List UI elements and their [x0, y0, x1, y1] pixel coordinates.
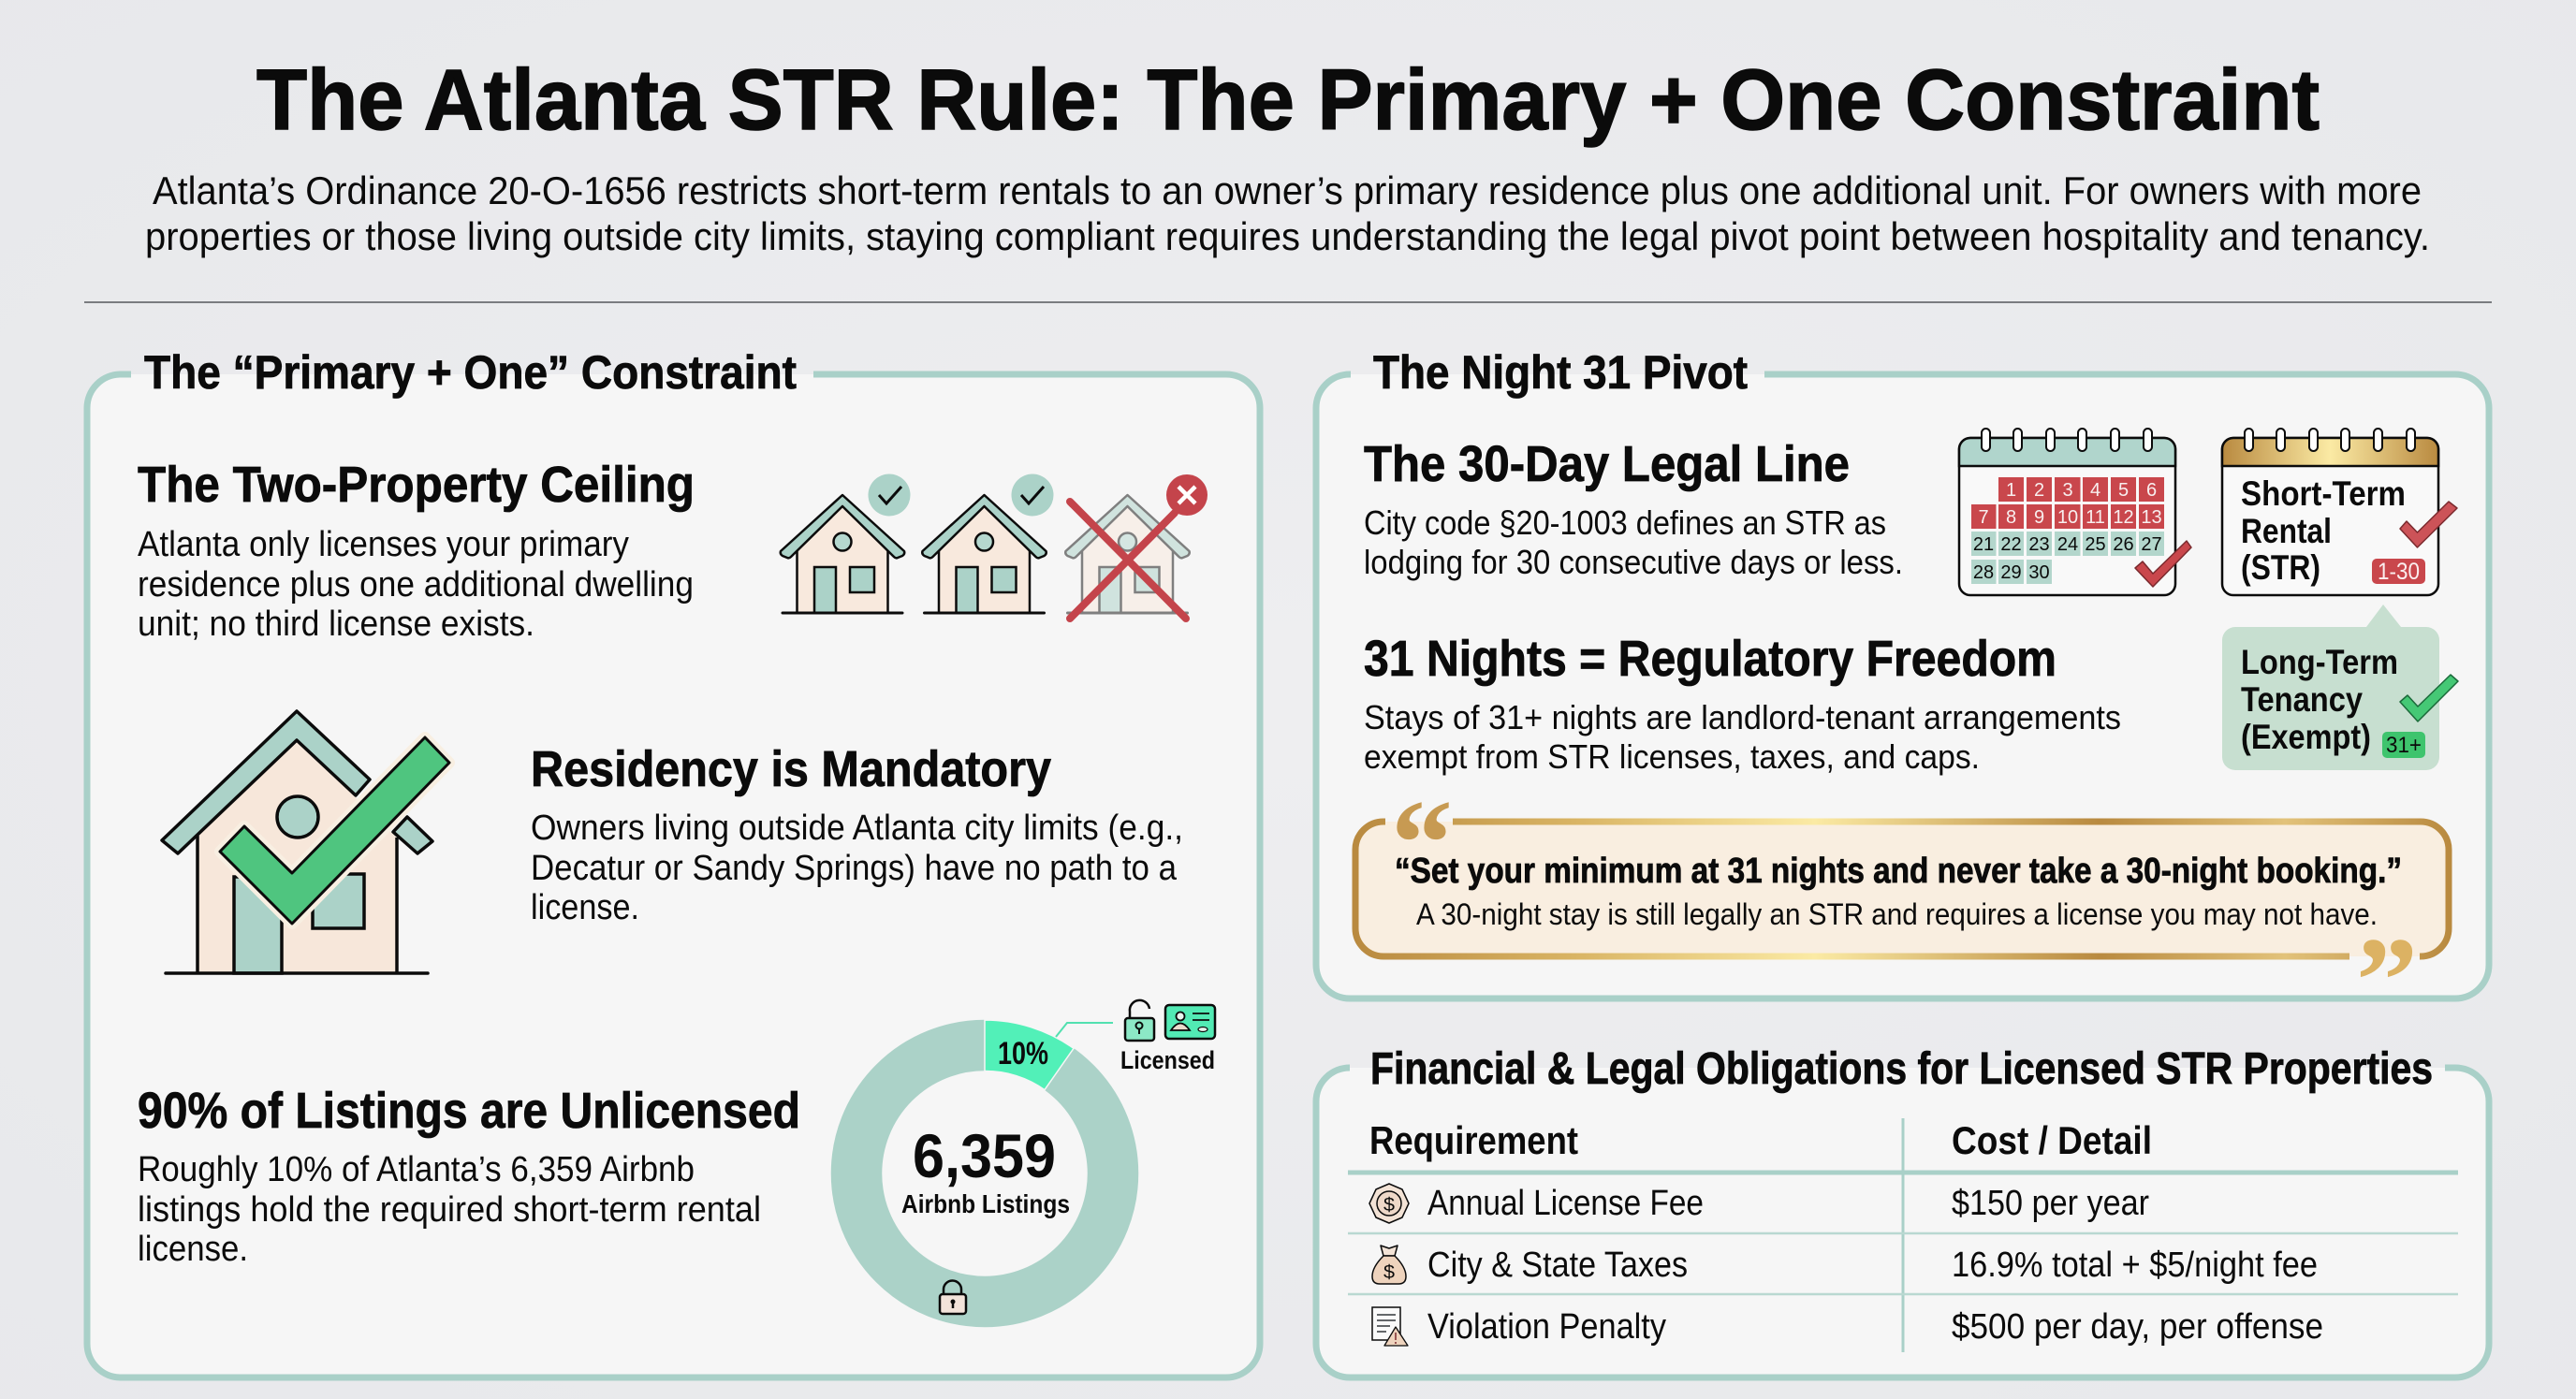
icon: calendar of 30 days: 23 — [2028, 534, 2050, 555]
section: 30-day legal line — [1364, 436, 1903, 581]
section: 31 nights regulatory freedom: Stays of 31+ nights are landlord-tenant arrangements — [1364, 698, 2121, 736]
icon: calendar of 30 days: 1 — [2006, 480, 2016, 501]
table header — [1369, 1118, 2152, 1162]
section: residency is mandatory: license. — [531, 888, 639, 927]
icon: calendar of 30 days: 6 — [2146, 480, 2157, 501]
panel heading: The “Primary + One” Constraint — [144, 346, 797, 399]
callout text: A 30-night stay is still legally an STR and requires a license you may not have. — [1416, 897, 2378, 931]
icon: calendar of 30 days: 28 — [1973, 562, 1994, 583]
icon: closed lock — [940, 1280, 966, 1314]
card: short-term rental: Short-Term — [2241, 474, 2406, 513]
icon: licensed house two — [922, 474, 1054, 613]
row: city and state taxes: City & State Taxes — [1427, 1246, 1688, 1285]
icon: calendar of 30 days: 29 — [2000, 562, 2022, 583]
callout text — [1395, 852, 2402, 931]
panel: night 31 pivot — [1316, 346, 2489, 1049]
icon: calendar of 30 days: 4 — [2090, 480, 2100, 501]
section: 30-day legal line: The 30-Day Legal Line — [1364, 436, 1850, 492]
icon: prohibited third house — [1065, 474, 1208, 619]
row: annual license fee — [1369, 1184, 2149, 1223]
intro paragraph: properties or those living outside city limits, staying compliant requires understanding the legal pivot point between hospitality and tenancy. — [145, 214, 2430, 258]
card: short-term rental: (STR) — [2241, 548, 2320, 587]
icon: calendar of 30 days: 2 — [2034, 480, 2044, 501]
icon: calendar of 30 days: 30 — [2028, 562, 2050, 583]
icon: calendar of 30 days: 7 — [1978, 507, 1989, 528]
section: 31 nights regulatory freedom: 31 Nights = Regulatory Freedom — [1364, 631, 2056, 687]
card: long-term tenancy: (Exempt) — [2241, 718, 2371, 756]
section: 30-day legal line: City code §20-1003 defines an STR as — [1364, 503, 1886, 542]
section: 30-day legal line: lodging for 30 consecutive days or less. — [1364, 543, 1903, 581]
card: short-term rental: 1-30 — [2378, 559, 2420, 585]
card: long-term tenancy — [2222, 605, 2458, 770]
icon: calendar of 30 days: 5 — [2118, 480, 2129, 501]
icon: calendar of 30 days: 11 — [2086, 507, 2105, 528]
title: The Atlanta STR Rule: The Primary + One Constraint — [256, 52, 2320, 148]
card: short-term rental — [2222, 429, 2457, 595]
icon: license card — [1165, 1005, 1215, 1039]
section: 31 nights regulatory freedom — [1364, 631, 2121, 776]
icon: calendar of 30 days: 12 — [2113, 507, 2134, 528]
section: 31 nights regulatory freedom: exempt from STR licenses, taxes, and caps. — [1364, 737, 1980, 776]
table header: Requirement — [1369, 1118, 1578, 1162]
icon: calendar of 30 days: 24 — [2057, 534, 2078, 555]
section: 90 percent unlicensed: license. — [138, 1230, 248, 1269]
icon: money bag — [1372, 1246, 1406, 1284]
icon: calendar of 30 days: 26 — [2113, 534, 2134, 555]
table header: Cost / Detail — [1952, 1118, 2152, 1162]
section: 90 percent unlicensed: 90% of Listings are Unlicensed — [138, 1083, 800, 1139]
callout: minimum stay advice — [1355, 774, 2449, 1049]
icon: calendar of 30 days: 9 — [2034, 507, 2044, 528]
icon: calendar of 30 days: 3 — [2062, 480, 2073, 501]
row: violation penalty: $500 per day, per offense — [1952, 1307, 2323, 1347]
donut center total: 6,359 — [913, 1121, 1056, 1190]
card: long-term tenancy: Long-Term — [2241, 643, 2398, 681]
label: licensed: Licensed — [1120, 1046, 1215, 1074]
icon: licensed house one — [781, 474, 910, 613]
section: residency is mandatory: Residency is Mandatory — [531, 741, 1051, 797]
section: 90 percent unlicensed: Roughly 10% of Atlanta’s 6,359 Airbnb — [138, 1150, 695, 1189]
table: requirements and costs — [1348, 1118, 2458, 1352]
panel heading: The Night 31 Pivot — [1373, 346, 1748, 399]
label: 10 percent: 10% — [998, 1036, 1048, 1071]
donut center total: Airbnb Listings — [901, 1189, 1070, 1218]
intro paragraph: Atlanta’s Ordinance 20-O-1656 restricts short-term rentals to an owner’s primary residence plus one additional unit. For owners with more — [153, 168, 2422, 212]
icon: calendar of 30 days: 8 — [2006, 507, 2016, 528]
section: two-property ceiling: The Two-Property Ceiling — [138, 457, 695, 513]
section: residency is mandatory — [531, 741, 1183, 927]
section: two-property ceiling: Atlanta only licenses your primary — [138, 525, 629, 564]
icon: calendar of 30 days: 13 — [2141, 507, 2162, 528]
icon: document with warning — [1372, 1307, 1408, 1346]
section: two-property ceiling — [138, 457, 695, 644]
opening quote mark: “ — [1391, 774, 1453, 911]
intro paragraph — [145, 168, 2430, 258]
row: violation penalty: Violation Penalty — [1427, 1307, 1666, 1347]
icon: open lock — [1125, 1000, 1154, 1041]
icon: money bag: $ — [1383, 1262, 1395, 1283]
section: two-property ceiling: unit; no third license exists. — [138, 605, 534, 644]
icon: calendar of 30 days: 21 — [1973, 534, 1994, 555]
donut center total — [901, 1121, 1070, 1218]
card: long-term tenancy: 31+ — [2386, 733, 2422, 758]
card: long-term tenancy: Tenancy — [2241, 680, 2363, 719]
row: annual license fee: Annual License Fee — [1427, 1184, 1704, 1223]
chart: donut of licensed share — [856, 1000, 1215, 1314]
donut segment: 10 percent licensed — [985, 1020, 1074, 1090]
section: residency is mandatory: Decatur or Sandy Springs) have no path to a — [531, 849, 1178, 888]
icon: calendar of 30 days: 22 — [2000, 534, 2022, 555]
panel: primary + one constraint — [87, 346, 1260, 1377]
panel: financial and legal obligations — [1316, 1044, 2489, 1377]
section: two-property ceiling: residence plus one additional dwelling — [138, 565, 694, 605]
section: residency is mandatory: Owners living outside Atlanta city limits (e.g., — [531, 809, 1183, 848]
icon: calendar of 30 days: 10 — [2057, 507, 2078, 528]
icon: large house with check — [162, 711, 449, 973]
row: city and state taxes: 16.9% total + $5/night fee — [1952, 1246, 2318, 1285]
icon: calendar of 30 days: 25 — [2085, 534, 2106, 555]
icon: calendar of 30 days — [1959, 429, 2191, 595]
closing quote mark: ” — [2356, 911, 2418, 1049]
card: short-term rental: Rental — [2241, 512, 2332, 550]
row: violation penalty — [1372, 1307, 2323, 1347]
icon: calendar of 30 days: 27 — [2141, 534, 2162, 555]
section: 90 percent unlicensed — [138, 1083, 800, 1269]
row: annual license fee: $150 per year — [1952, 1184, 2149, 1223]
section: 90 percent unlicensed: listings hold the required short-term rental — [138, 1190, 761, 1230]
callout text: “Set your minimum at 31 nights and never take a 30-night booking.” — [1395, 852, 2402, 891]
row: city and state taxes — [1372, 1246, 2318, 1285]
icon: three houses, third crossed out — [781, 474, 1208, 619]
icon: fee badge: $ — [1383, 1195, 1395, 1216]
icon: fee badge — [1369, 1184, 1409, 1223]
